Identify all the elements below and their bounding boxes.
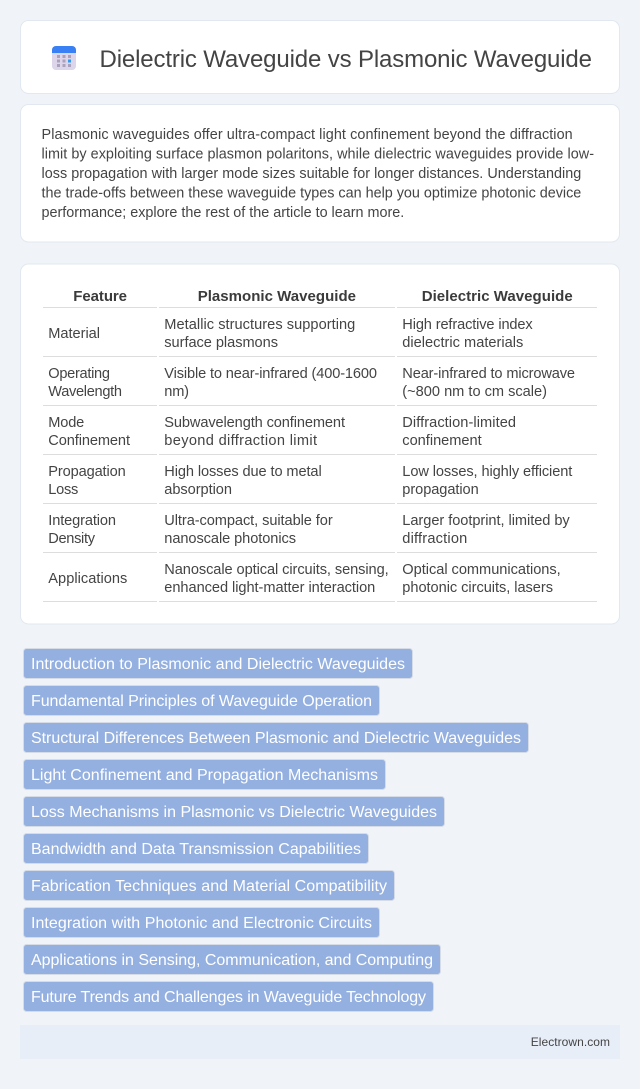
section link: loss mechanisms: Loss Mechanisms in Plasmonic vs Dielectric Waveguides (31, 804, 437, 821)
table row: operating wavelength: Near-infrared to microwave (402, 366, 575, 382)
section link: fabrication: Fabrication Techniques and Material Compatibility (31, 878, 387, 895)
table row: propagation loss (43, 464, 597, 504)
section link: loss mechanisms (24, 796, 444, 826)
table row: integration density: Larger footprint, limited by (402, 513, 570, 529)
table header: Feature (73, 288, 127, 305)
table row: material: High refractive index (402, 317, 533, 333)
text block: intro paragraph: performance; explore the rest of the article to learn more. (42, 205, 404, 221)
table header: Dielectric Waveguide (422, 288, 573, 305)
table row: applications: enhanced light-matter interaction (164, 580, 375, 596)
table row: applications: Applications (48, 571, 127, 587)
panel: introduction (20, 104, 620, 242)
table row: propagation loss: propagation (402, 482, 479, 498)
table row: operating wavelength: Wavelength (48, 384, 122, 400)
table row: operating wavelength: Operating (48, 366, 110, 382)
table row: operating wavelength: (~800 nm to cm scale) (402, 384, 547, 400)
table row: integration density: nanoscale photonics (164, 531, 296, 547)
table row: propagation loss: Loss (48, 482, 78, 498)
section link: integration: Integration with Photonic and Electronic Circuits (31, 915, 372, 932)
table row: mode confinement: Diffraction-limited (402, 415, 516, 431)
text block: intro paragraph (42, 127, 594, 221)
icon: calendar (52, 46, 76, 70)
table row: material: dielectric materials (402, 335, 523, 351)
table row: integration density: Integration (48, 513, 116, 529)
list: article sections (24, 648, 528, 1012)
section link: confinement: Light Confinement and Propagation Mechanisms (31, 767, 378, 784)
section link: integration (24, 908, 380, 938)
table row: material: Metallic structures supporting (164, 317, 355, 333)
section link: applications: Applications in Sensing, Communication, and Computing (31, 952, 433, 969)
section link: structural differences (24, 722, 528, 752)
section link: future trends: Future Trends and Challenges in Waveguide Technology (31, 989, 426, 1006)
table row: propagation loss: High losses due to metal (164, 464, 322, 480)
section link: introduction: Introduction to Plasmonic and Dielectric Waveguides (31, 656, 405, 673)
panel: header (20, 20, 620, 94)
section link: introduction (24, 648, 412, 678)
table row: mode confinement: Confinement (48, 433, 130, 449)
title: Dielectric Waveguide vs Plasmonic Waveguide (100, 46, 592, 73)
table row: integration density: diffraction (402, 531, 467, 547)
section link: fundamentals (24, 686, 380, 716)
table row: integration density: Ultra-compact, suitable for (164, 513, 333, 529)
table row: propagation loss: Low losses, highly efficient (402, 464, 572, 480)
table row: mode confinement: Subwavelength confinement (164, 415, 345, 431)
table row: mode confinement (43, 415, 597, 455)
panel: comparison table (20, 264, 620, 624)
table row: applications: Optical communications, (402, 562, 561, 578)
table row: operating wavelength: nm) (164, 384, 189, 400)
table row: applications (43, 562, 597, 602)
section link: confinement (24, 760, 386, 790)
table row: mode confinement: Mode (48, 415, 84, 431)
table row: mode confinement: beyond diffraction limit (164, 433, 317, 449)
section link: bandwidth: Bandwidth and Data Transmission Capabilities (31, 841, 361, 858)
table row: operating wavelength (43, 366, 597, 406)
footer (20, 1025, 620, 1059)
section link: future trends (24, 982, 434, 1012)
table row: material: Material (48, 326, 100, 342)
section link: bandwidth (24, 834, 368, 864)
table row: mode confinement: confinement (402, 433, 482, 449)
table header (43, 288, 597, 308)
text block: intro paragraph: limit by exploiting surface plasmon polaritons, while dielectric waveguides provide low- (42, 146, 594, 162)
table row: integration density: Density (48, 531, 96, 547)
footer: Electrown.com (531, 1035, 610, 1049)
section link: structural differences: Structural Differences Between Plasmonic and Dielectric Waveguides (31, 730, 521, 747)
table row: applications: Nanoscale optical circuits, sensing, (164, 562, 389, 578)
table row: propagation loss: absorption (164, 482, 232, 498)
text block: intro paragraph: loss propagation with larger mode sizes suitable for longer distances. Understanding (42, 166, 581, 182)
table row: material (43, 317, 597, 357)
table row: applications: photonic circuits, lasers (402, 580, 553, 596)
text block: intro paragraph: Plasmonic waveguides offer ultra-compact light confinement beyond the diffraction (42, 127, 573, 143)
table header: Plasmonic Waveguide (198, 288, 356, 305)
section link: fabrication (24, 870, 394, 900)
section link: applications (24, 944, 440, 974)
table row: integration density (43, 513, 597, 553)
text block: intro paragraph: the trade-offs between these waveguide types can help you optimize photonic device (42, 186, 581, 202)
table row: propagation loss: Propagation (48, 464, 126, 480)
section link: fundamentals: Fundamental Principles of Waveguide Operation (31, 693, 372, 710)
table row: operating wavelength: Visible to near-infrared (400-1600 (164, 366, 377, 382)
table row: material: surface plasmons (164, 335, 278, 351)
